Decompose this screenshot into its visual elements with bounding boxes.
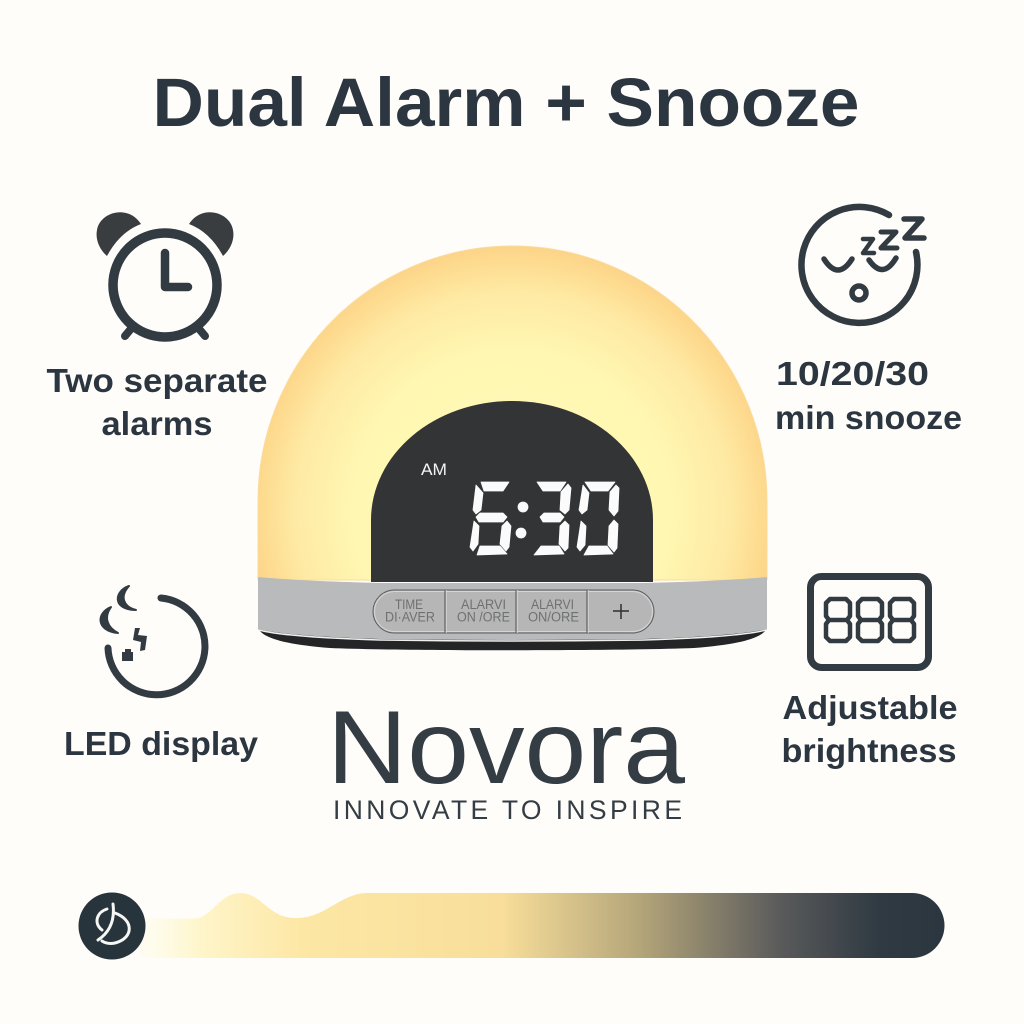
AM indicator: AM: [421, 461, 447, 479]
label: snooze durations: min snooze: [775, 399, 962, 436]
wordmark: Novora: [327, 690, 685, 806]
button: alarm 1: ALARVI: [461, 597, 506, 612]
button: alarm 1: ON /ORE: [457, 610, 510, 624]
icon: alarm clock: [97, 212, 233, 337]
button: plus: [613, 604, 629, 619]
grey base band: [258, 577, 767, 640]
label: two separate alarms: Two separate: [46, 362, 268, 399]
product: sunrise alarm clock: [258, 246, 767, 650]
button: alarm 2: ON/ORE: [528, 610, 579, 624]
lamp dome: [258, 246, 767, 580]
label: snooze durations: [775, 355, 962, 436]
button strip: [373, 590, 654, 633]
label: adjustable brightness: Adjustable: [782, 689, 958, 726]
brightness gradient bar: [78, 892, 944, 960]
button: time dimmer: TIME: [395, 597, 423, 612]
wave gradient: [140, 893, 944, 958]
button: alarm 2: ALARVI: [531, 597, 574, 612]
digital time 6:30: [470, 482, 619, 555]
tagline: INNOVATE TO INSPIRE: [333, 795, 682, 825]
label: LED display: LED display: [64, 725, 259, 762]
button: alarm 2: [528, 597, 579, 624]
display panel: [371, 401, 653, 582]
label: two separate alarms: alarms: [102, 405, 212, 442]
icon: moon badge: [78, 892, 146, 960]
label: two separate alarms: [46, 362, 268, 442]
black foot: [258, 628, 767, 650]
title: Dual Alarm + Snooze: [152, 64, 860, 141]
button: time dimmer: DI·AVER: [385, 610, 435, 624]
brand logo: [327, 690, 685, 825]
icon: sleeping face: [801, 207, 924, 323]
label: snooze durations: 10/20/30: [776, 355, 929, 392]
icon: moon and bolt timer: [101, 586, 205, 695]
button: time dimmer: [385, 597, 435, 624]
button: alarm 1: [457, 597, 510, 624]
label: adjustable brightness: brightness: [782, 732, 956, 769]
icon: LED digits panel: [810, 576, 928, 668]
label: adjustable brightness: [782, 689, 958, 769]
